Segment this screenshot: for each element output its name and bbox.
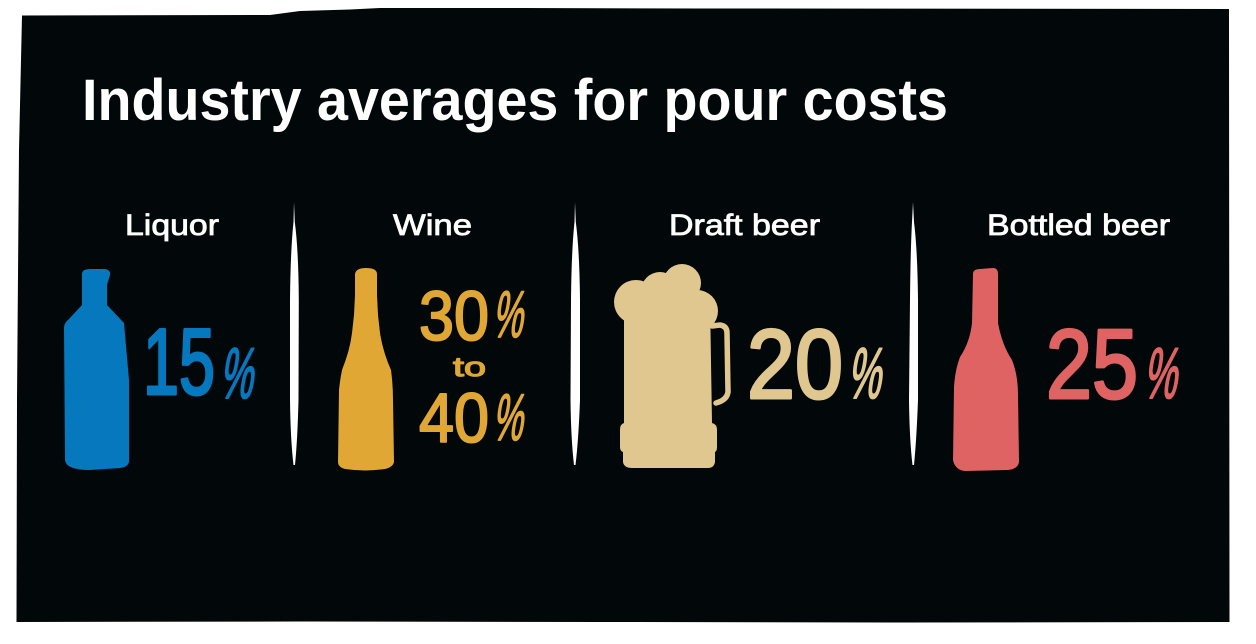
icon: wine bottle <box>338 268 394 470</box>
value: 15%: 15 <box>143 309 215 414</box>
panel: bottled beer <box>953 209 1187 471</box>
divider 1 <box>290 202 299 465</box>
title: Industry averages for pour costs <box>82 68 948 133</box>
value: 30% to 40% <box>419 277 532 457</box>
panel: wine <box>338 209 532 470</box>
value: 20%: % <box>844 333 891 414</box>
label: draft beer: Draft beer <box>669 209 820 242</box>
label: bottled beer: Bottled beer <box>987 209 1170 242</box>
label: liquor: Liquor <box>125 209 219 242</box>
icon: liquor bottle <box>64 269 129 470</box>
divider 2 <box>570 202 580 465</box>
value: 20%: 20 <box>747 309 843 419</box>
value: 25%: 25 <box>1046 309 1138 419</box>
value: 30% to 40%: to <box>453 352 486 382</box>
value: 25%: % <box>1140 333 1187 414</box>
value: 30% to 40%: % <box>489 278 532 352</box>
icon: beer mug <box>614 264 728 468</box>
panel: draft beer <box>614 209 891 468</box>
panel: liquor <box>64 209 263 470</box>
divider 3 <box>909 202 918 465</box>
value: 15%: % <box>216 333 263 414</box>
value: 30% to 40%: 40 <box>419 379 489 457</box>
value: 30% to 40%: 30 <box>419 277 489 355</box>
icon: beer bottle <box>953 268 1019 471</box>
label: wine: Wine <box>393 209 472 242</box>
value: 30% to 40%: % <box>489 381 532 455</box>
